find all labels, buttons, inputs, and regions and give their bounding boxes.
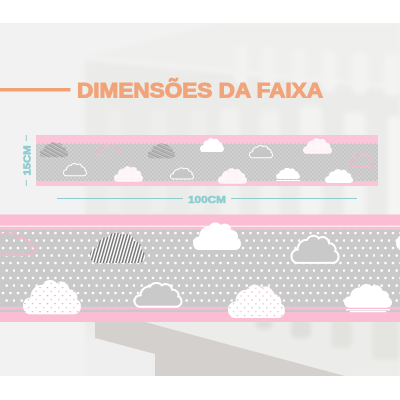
- small hearts cloud 1: [303, 138, 332, 154]
- small solid white cloud: [325, 169, 353, 183]
- small pink outline cloud 1: [97, 145, 120, 155]
- large white lined cloud: [344, 284, 392, 312]
- small striped cloud 2: [148, 143, 175, 158]
- large hearts cloud 2: [228, 285, 285, 318]
- large grey outline cloud: [134, 283, 182, 307]
- large striped cloud: [90, 233, 145, 263]
- large hearts cloud 1: [23, 280, 81, 314]
- large border strip: [0, 214, 400, 322]
- small outline cloud 1: [250, 146, 272, 158]
- large pink outline cloud: [0, 232, 35, 255]
- small outline cloud 2: [64, 164, 86, 176]
- small white cloud: [200, 138, 224, 152]
- small hearts cloud 3: [218, 168, 247, 184]
- title rule: [0, 88, 70, 92]
- height measure 15cm: 15CM: [22, 145, 34, 176]
- cloud at right edge: [396, 235, 400, 251]
- small outline cloud 3: [170, 168, 194, 179]
- small white lined cloud: [276, 168, 300, 181]
- large white cloud: [193, 222, 241, 250]
- large strip background: [0, 214, 400, 322]
- width measure 100cm: 100CM: [188, 194, 226, 206]
- small hearts cloud 2: [114, 166, 143, 182]
- height measure 15cm: [22, 135, 34, 186]
- small striped cloud 1: [40, 142, 68, 157]
- small strip background: [36, 135, 378, 186]
- small border strip: [36, 135, 378, 186]
- small pink outline cloud 2: [350, 154, 373, 167]
- large outline cloud: [292, 236, 338, 263]
- title: DIMENSÕES DA FAIXA: [77, 78, 323, 102]
